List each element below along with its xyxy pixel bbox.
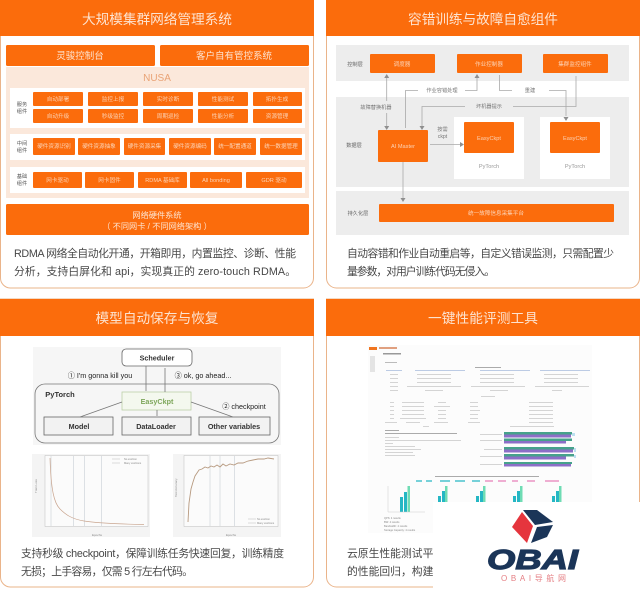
row: base components: RDMA 基础库	[145, 176, 180, 184]
chart: test accuracy: Test Accuracy	[174, 478, 178, 497]
text: cloud native performance	[347, 546, 498, 578]
row: service components: 服务	[17, 100, 27, 108]
row: service components: 自动升级	[47, 112, 70, 120]
header: cluster network management	[0, 0, 314, 36]
wordmark: OBAI: OBAI	[487, 544, 580, 575]
subtitle: OBAI navigation: OBAI导航网	[501, 573, 566, 583]
box: scheduler: 调度器	[394, 60, 411, 68]
worker: EasyCkpt 2: PyTorch	[565, 164, 585, 170]
header: model save and restore	[0, 299, 314, 336]
row: service components: 拓扑生成	[266, 95, 289, 103]
NUSA block: NUSA	[143, 73, 171, 84]
row: middleware components: 硬件资源抽象	[82, 142, 116, 150]
row: middleware components	[10, 134, 305, 160]
row: middleware components: 中间	[17, 139, 27, 147]
text: checkpoint description: 支持秒级 checkpoint，保障训练任务快速回复，训练精度	[21, 546, 284, 560]
bar: unified fault collection platform	[379, 204, 614, 222]
row: middleware components: 硬件资源编码	[173, 142, 207, 150]
icon: cube	[512, 510, 553, 543]
chart: train loss: No eviction	[124, 457, 137, 461]
NUSA block	[6, 67, 309, 198]
architecture diagram	[336, 45, 629, 235]
worker: EasyCkpt 1: EasyCkpt	[477, 136, 501, 142]
block: network hardware system: （ 不同网卡 / 不同网络架构 ）	[102, 221, 212, 231]
architecture diagram: 持久化层	[348, 209, 368, 217]
row: service components: 监控上报	[102, 95, 125, 103]
architecture diagram: 数据层	[346, 141, 362, 149]
row: base components: GDR 驱动	[261, 177, 287, 184]
row: service components: 自动部署	[47, 95, 70, 103]
worker: EasyCkpt 2: EasyCkpt	[563, 136, 587, 142]
text: cloud native performance: 云原生性能测试平台，支持一键	[347, 546, 498, 560]
chart: test accuracy	[173, 454, 281, 537]
chart: train loss: Epochs	[92, 533, 102, 537]
box: job controller	[457, 54, 522, 73]
arrow: replace machine	[360, 74, 392, 130]
architecture diagram: 控制层	[347, 60, 363, 68]
EasyCkpt diagram: Scheduler	[140, 354, 175, 362]
row: middleware components: 统一配置通道	[218, 142, 252, 150]
panel: performance testing tool	[326, 299, 640, 587]
text: fault tolerance description: 量参数，对用户训练代码无侵入。	[347, 264, 495, 278]
arrow: job fault handling: 作业容错处理	[426, 86, 458, 94]
text: RDMA description	[14, 246, 296, 278]
worker: EasyCkpt 1: PyTorch	[479, 164, 499, 170]
EasyCkpt diagram: ③ ok, go ahead...	[175, 371, 231, 380]
chart: test accuracy: No eviction	[257, 517, 270, 521]
row: middleware components: 统一数据管理	[264, 142, 298, 150]
header: one-click performance tool: 一键性能评测工具	[428, 311, 538, 326]
chart: test accuracy: Many evictions	[257, 521, 275, 525]
header: model save and restore: 模型自动保存与恢复	[96, 310, 219, 326]
EasyCkpt diagram: ① I'm gonna kill you	[68, 371, 132, 380]
arrow: bad machine hint: 坏机器提示	[476, 102, 502, 110]
box: job controller: 作业控制器	[475, 60, 503, 68]
text: cloud native performance: 的性能回归，构建性能基线。	[347, 564, 487, 578]
panel: model auto save	[0, 299, 314, 587]
row: base components: 网卡驱动	[46, 176, 69, 184]
box: AI Master	[378, 130, 428, 162]
box: cluster monitor	[543, 54, 608, 73]
header: fault tolerance: 容错训练与故障自愈组件	[408, 11, 558, 27]
button: customer control system	[160, 45, 309, 66]
arrow: rebuild	[500, 75, 568, 121]
header: one-click performance tool	[326, 299, 640, 336]
row: middleware components: 硬件资源识别	[37, 142, 71, 150]
row: service components: 性能分析	[212, 112, 235, 120]
box: AI Master: AI Master	[391, 144, 415, 150]
box: cluster monitor: 集群监控组件	[558, 60, 592, 68]
chart: test accuracy: Epochs	[226, 533, 236, 537]
watermark: OBAI logo	[433, 502, 640, 592]
text: checkpoint description: 无损；上手容易，仅需 5 行左右代码。	[21, 564, 193, 578]
worker: EasyCkpt 1	[454, 117, 524, 179]
screenshot: benchmark report: BW: 4 results	[384, 520, 400, 524]
row: service components: 性能测试	[212, 95, 235, 103]
row: base components: All bonding	[202, 178, 230, 184]
row: service components: 资源管理	[266, 112, 289, 120]
text: fault tolerance description: 自动容错和作业自动重启等，自定义错误监测，只需配置少	[347, 246, 614, 260]
panel: fault-tolerant training	[326, 0, 640, 288]
EasyCkpt diagram: PyTorch	[45, 390, 75, 399]
screenshot: benchmark report: Bandwidth: 4 results	[384, 524, 408, 528]
row: base components	[10, 167, 305, 193]
EasyCkpt diagram	[33, 347, 281, 445]
arrow: on-demand ckpt	[430, 125, 464, 147]
EasyCkpt diagram: Model	[69, 422, 89, 431]
block: network hardware system	[6, 204, 309, 235]
row: service components: 周期巡检	[157, 112, 180, 120]
box: scheduler	[370, 54, 435, 73]
worker: EasyCkpt 2	[540, 117, 610, 179]
chart: train loss: Train Loss	[34, 479, 38, 493]
arrow: on-demand ckpt: ckpt	[438, 134, 448, 140]
button: console: 灵骏控制台	[56, 50, 104, 62]
chart: train loss	[32, 454, 150, 537]
panel: cluster network management	[0, 0, 314, 288]
screenshot: benchmark report: QPS: 4 results	[384, 516, 401, 520]
arrow: replace machine: 故障替换机器	[360, 103, 392, 111]
EasyCkpt diagram: Other variables	[208, 422, 260, 431]
chart: train loss: Many evictions	[124, 461, 142, 465]
arrow: on-demand ckpt: 按需	[437, 125, 448, 133]
row: service components: 秒级监控	[102, 112, 125, 120]
text: RDMA description: RDMA 网络全自动化开通，开箱即用，内置监控、诊断、性能	[14, 246, 296, 260]
text: RDMA description: 分析，支持白屏化和 api，实现真正的 zero-touch RDMA。	[14, 264, 296, 278]
button: customer control system: 客户自有管控系统	[196, 50, 272, 62]
header: cluster network management: 大规模集群网络管理系统	[82, 12, 232, 27]
screenshot: benchmark report	[368, 345, 592, 533]
bar: unified fault collection platform: 统一故障信息采集平台	[468, 209, 524, 217]
block: network hardware system: 网络硬件系统	[132, 210, 182, 220]
row: middleware components: 组件	[17, 146, 27, 154]
row: service components: 组件	[17, 107, 27, 115]
header: fault tolerance	[326, 0, 640, 36]
row: base components: 组件	[17, 179, 27, 187]
screenshot: benchmark report: Storage Capacity: 4 results	[384, 528, 416, 532]
row: base components: 网卡固件	[98, 176, 121, 184]
button: console	[6, 45, 155, 66]
row: base components: 基础	[17, 172, 27, 180]
arrow: job fault handling	[406, 74, 480, 128]
text: fault tolerance description	[347, 246, 614, 278]
row: service components: 实时诊断	[157, 95, 180, 103]
EasyCkpt diagram: DataLoader	[136, 422, 176, 431]
arrow: rebuild: 重建	[525, 86, 535, 94]
arrow: bad machine hint	[420, 76, 576, 130]
arrow: to persistence	[400, 162, 406, 202]
EasyCkpt diagram: EasyCkpt	[141, 397, 174, 406]
EasyCkpt diagram: ② checkpoint	[222, 402, 266, 411]
row: service components	[10, 88, 305, 128]
row: middleware components: 硬件资源采集	[128, 142, 162, 150]
text: checkpoint description	[21, 546, 284, 578]
